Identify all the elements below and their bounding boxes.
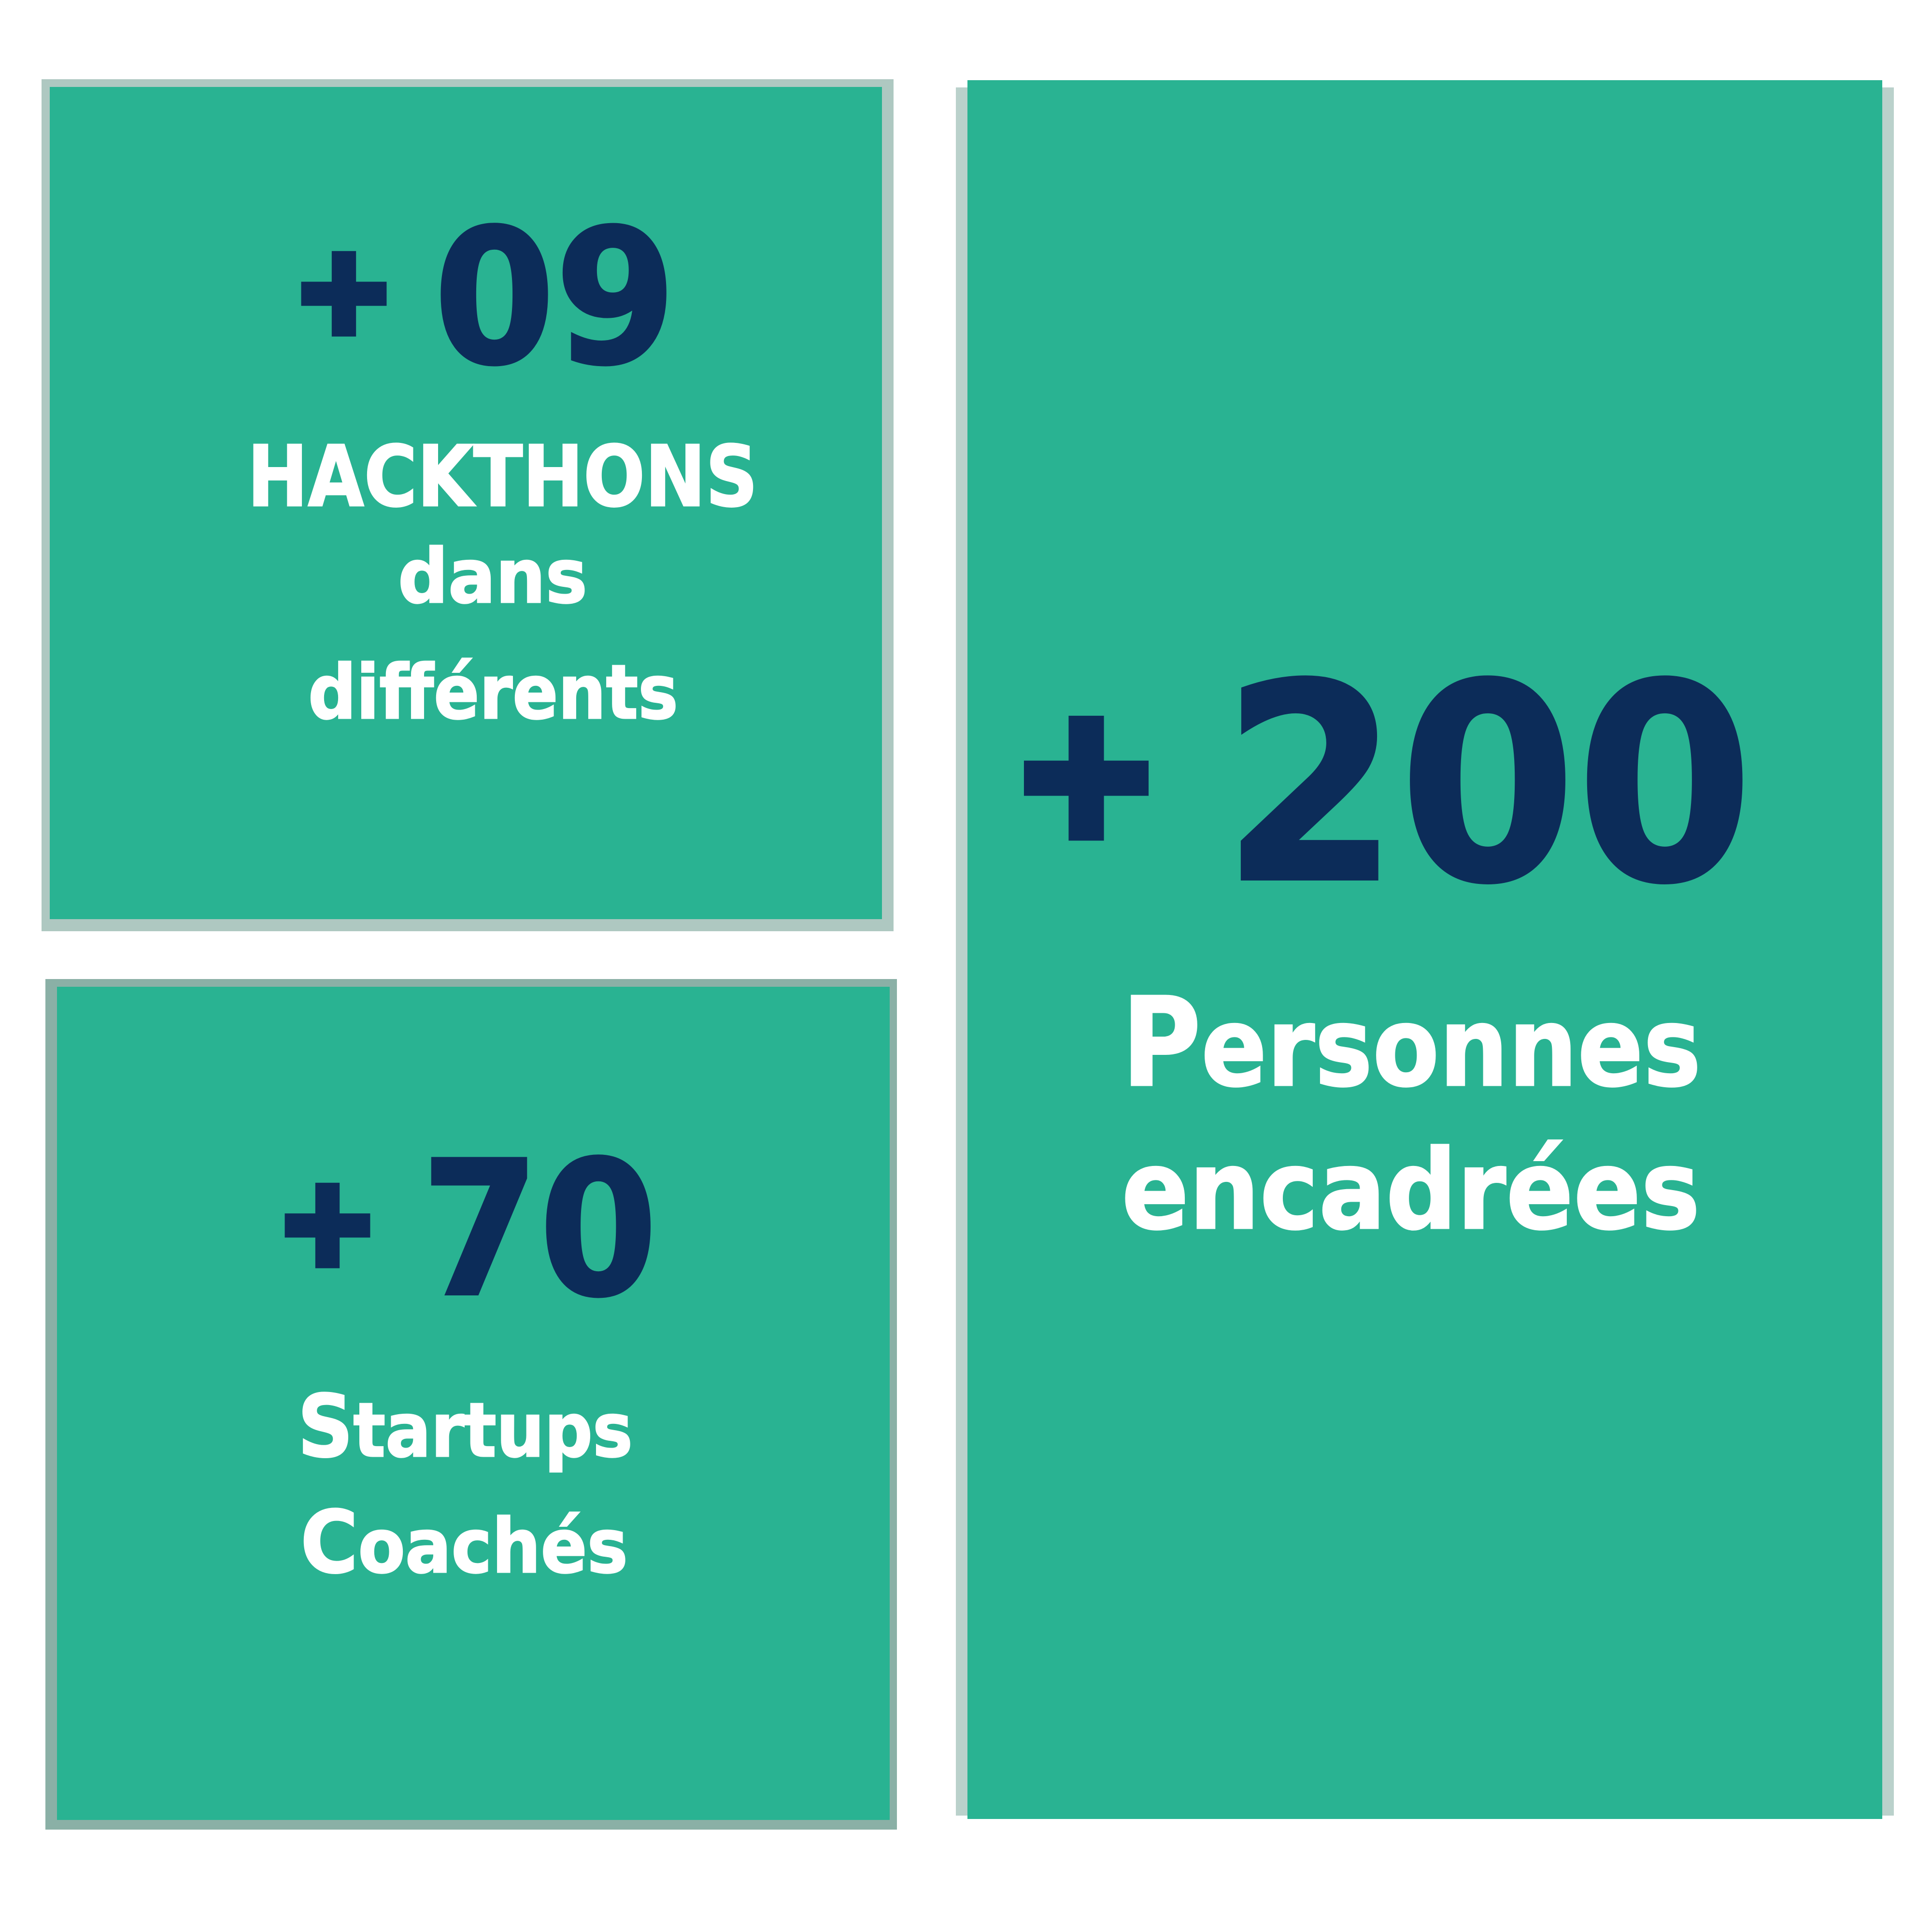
- plus sign: personnes: +: [1013, 670, 1160, 875]
- panel fill: personnes: [967, 80, 1882, 1819]
- label: Startups: Startups: [298, 1377, 633, 1477]
- number: 70: 70: [421, 1122, 657, 1338]
- number: 09: 09: [434, 190, 676, 406]
- label: différents: différents: [308, 649, 678, 736]
- label: HACKTHONS: HACKTHONS: [247, 428, 758, 526]
- panel frame: startups: [45, 979, 897, 1830]
- panel: personnes: [956, 80, 1894, 1819]
- panel fill: hackathons: [50, 87, 882, 919]
- panel: hackathons: [42, 79, 894, 931]
- panel shadow: personnes: [956, 87, 1894, 1816]
- plus sign: startups: +: [277, 1152, 378, 1292]
- panel: startups: [45, 979, 897, 1830]
- label: Coachés: Coachés: [300, 1492, 628, 1592]
- label: encadrées: encadrées: [1122, 1126, 1700, 1254]
- panel fill: startups: [57, 987, 890, 1820]
- label: dans: dans: [398, 533, 587, 620]
- plus sign: hackathons: +: [294, 221, 394, 360]
- panel frame: hackathons: [42, 79, 894, 931]
- label: Personnes: Personnes: [1122, 971, 1701, 1115]
- number: 200: 200: [1222, 626, 1753, 944]
